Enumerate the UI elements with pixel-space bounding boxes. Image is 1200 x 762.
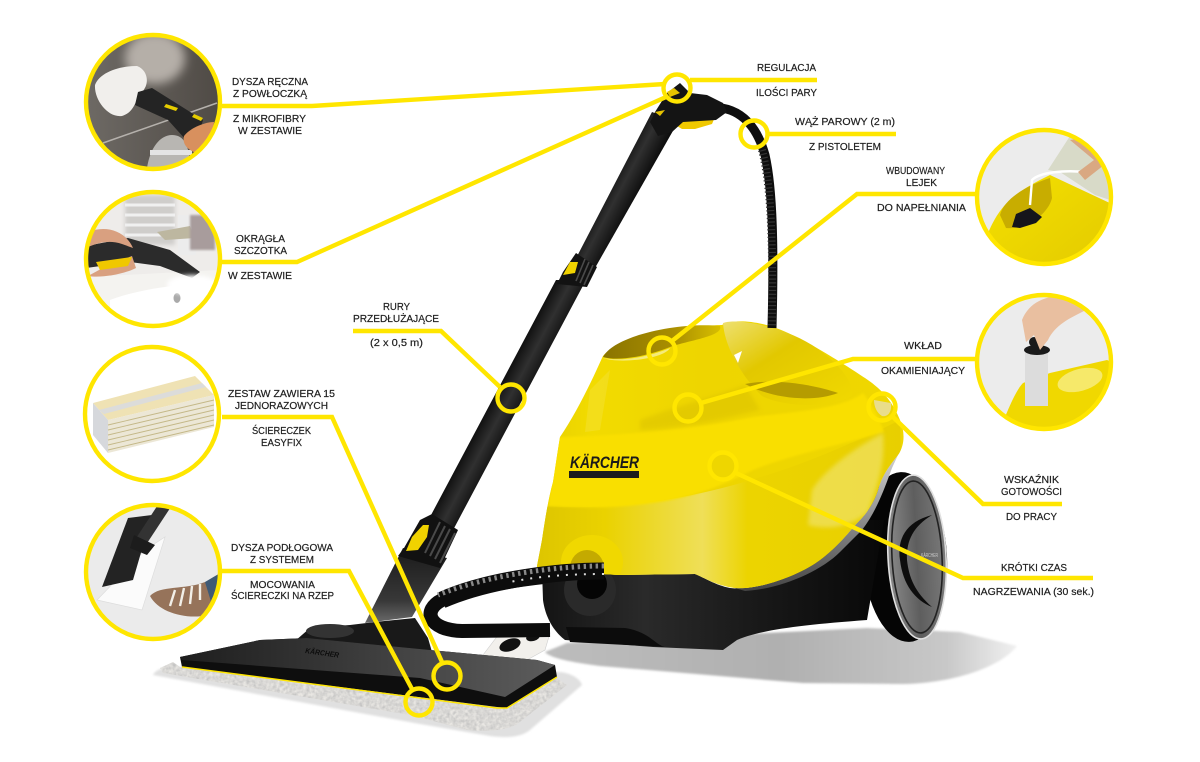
- label: extension tubes: [353, 301, 439, 349]
- ribbed hose entering socket: [438, 566, 604, 600]
- ready indicator lens: [874, 400, 891, 416]
- lower body highlight: [537, 450, 901, 588]
- leader: hand nozzle: [222, 84, 665, 106]
- leader: steam hose: [768, 132, 896, 136]
- label: cloth set: ZESTAW ZAWIERA 15: [228, 388, 335, 400]
- label: ready indicator: DO PRACY: [1006, 511, 1057, 523]
- label: ready indicator: WSKAŹNIK: [1004, 473, 1059, 486]
- marker: short heating time: [710, 452, 736, 480]
- KÄRCHER logo: KÄRCHER: [570, 453, 640, 472]
- marker: steam hose: [740, 120, 768, 148]
- label: floor nozzle: ŚCIERECZKI NA RZEP: [231, 589, 334, 602]
- label: ready indicator: [1001, 473, 1062, 523]
- label: ready indicator: GOTOWOŚCI: [1001, 485, 1062, 498]
- handle recess: [723, 321, 852, 405]
- yellow edge line: [182, 667, 557, 708]
- label: cloth set: [228, 388, 335, 449]
- leader: ready indicator: [892, 416, 1062, 504]
- label: built-in funnel: DO NAPEŁNIANIA: [877, 202, 966, 214]
- KÄRCHER logo: [569, 453, 640, 478]
- label: built-in funnel: [877, 165, 966, 214]
- upper shade: [641, 388, 756, 428]
- label: steam hose: [795, 115, 895, 153]
- base bumper: [566, 627, 665, 647]
- label: descaling cartridge: OKAMIENIAJĄCY: [881, 365, 965, 377]
- leader: steam regulation: [690, 78, 817, 82]
- label: extension tubes: (2 x 0,5 m): [370, 337, 423, 349]
- label: hand nozzle: W ZESTAWIE: [238, 125, 302, 137]
- label: cloth set: ŚCIERECZEK: [252, 424, 311, 437]
- pad shadow: [153, 667, 582, 737]
- label: short heating time: KRÓTKI CZAS: [1001, 561, 1067, 574]
- label: hand nozzle: [232, 76, 308, 137]
- swivel joint base: [295, 618, 432, 652]
- marker: floor nozzle: [406, 688, 432, 716]
- label: short heating time: NAGRZEWANIA (30 sek.): [973, 586, 1094, 598]
- extension tube: [365, 112, 678, 623]
- leader: short heating time: [736, 473, 1093, 578]
- swivel disc: [306, 624, 354, 638]
- marker: steam regulation: [664, 74, 690, 102]
- label: short heating time: [973, 561, 1094, 598]
- lower ribbed collar: [398, 514, 458, 568]
- white accessory clip behind nozzle: [483, 630, 550, 660]
- label: built-in funnel: LEJEK: [906, 177, 937, 189]
- microfibre pad: [160, 662, 567, 731]
- label: floor nozzle: DYSZA PODŁOGOWA: [231, 542, 333, 554]
- photo circle: hand nozzle: [85, 32, 221, 170]
- white glint: [734, 351, 742, 363]
- photo circle: round brush: [85, 191, 221, 330]
- label: round brush: W ZESTAWIE: [228, 270, 292, 282]
- nozzle body: [180, 638, 557, 708]
- steam hose lower loop: [431, 573, 600, 631]
- leader: cloth set: [222, 417, 442, 662]
- label: extension tubes: RURY: [383, 301, 410, 313]
- hose socket: [564, 564, 616, 616]
- label: cloth set: JEDNORAZOWYCH: [235, 400, 328, 412]
- funnel opening: [603, 325, 720, 359]
- label: round brush: [228, 233, 292, 282]
- wheel: KÄRCHER: [921, 552, 938, 559]
- label: steam regulation: [756, 62, 817, 99]
- label: extension tubes: PRZEDŁUŻAJĄCE: [353, 312, 439, 325]
- label: descaling cartridge: WKŁAD: [904, 340, 942, 352]
- photo circle: pack of cloths: [84, 346, 220, 482]
- upper steam hose: [722, 108, 773, 328]
- label: steam regulation: ILOŚCI PARY: [756, 86, 817, 99]
- label: floor nozzle: [231, 542, 334, 602]
- label: cloth set: EASYFIX: [261, 437, 302, 449]
- label: round brush: SZCZOTKA: [234, 245, 287, 257]
- leader: descaling cartridge: [701, 359, 976, 403]
- nozzle logo: KÄRCHER: [305, 646, 340, 660]
- floor shadow under steam cleaner: [545, 628, 1017, 684]
- callout lines and markers: [222, 74, 1093, 716]
- label: hand nozzle: Z POWŁOCZKĄ: [233, 88, 308, 100]
- nozzle top surface: [180, 638, 555, 697]
- pad texture: [160, 662, 567, 731]
- label: built-in funnel: WBUDOWANY: [886, 165, 945, 177]
- label: floor nozzle: Z SYSTEMEM: [250, 554, 314, 566]
- label: steam regulation: REGULACJA: [757, 62, 816, 74]
- steamer yellow body: [530, 321, 905, 600]
- photo circle: descaling cartridge: [976, 294, 1112, 430]
- label: floor nozzle: MOCOWANIA: [250, 579, 315, 591]
- marker: descaling cartridge: [674, 394, 702, 422]
- floor nozzle with microfibre pad: [153, 618, 582, 737]
- marker: extension tubes: [498, 384, 524, 412]
- mid tube section: [422, 280, 586, 532]
- left sheen: [585, 370, 610, 432]
- lower tube section: [365, 548, 447, 623]
- marker: ready indicator: [868, 394, 896, 420]
- leader: built-in funnel: [672, 194, 977, 341]
- right highlight: [808, 433, 883, 527]
- photo circle: filling the funnel: [976, 129, 1112, 270]
- label: steam hose: Z PISTOLETEM: [809, 141, 881, 153]
- wheel: [859, 470, 951, 644]
- gun handle with trigger: [650, 83, 727, 136]
- leader: round brush: [222, 97, 666, 262]
- leader: extension tubes: [353, 331, 500, 387]
- label: round brush: OKRĄGŁA: [236, 233, 285, 245]
- hose outlet bump: [561, 535, 623, 575]
- label: hand nozzle: DYSZA RĘCZNA: [232, 76, 308, 88]
- steamer silver trim: [735, 455, 898, 591]
- photo circle: floor nozzle and shoe: [85, 504, 222, 640]
- upper ribbed collar: [557, 253, 597, 287]
- label: descaling cartridge: [881, 340, 965, 377]
- label: hand nozzle: Z MIKROFIBRY: [233, 113, 306, 125]
- leader: floor nozzle: [222, 571, 412, 689]
- upper tube section: [572, 112, 678, 268]
- bright band: [548, 393, 884, 507]
- steamer black base: [542, 520, 884, 650]
- marker: cloth set: [434, 662, 460, 690]
- label: steam hose: WĄŻ PAROWY (2 m): [795, 115, 895, 128]
- marker: built-in funnel: [648, 338, 676, 364]
